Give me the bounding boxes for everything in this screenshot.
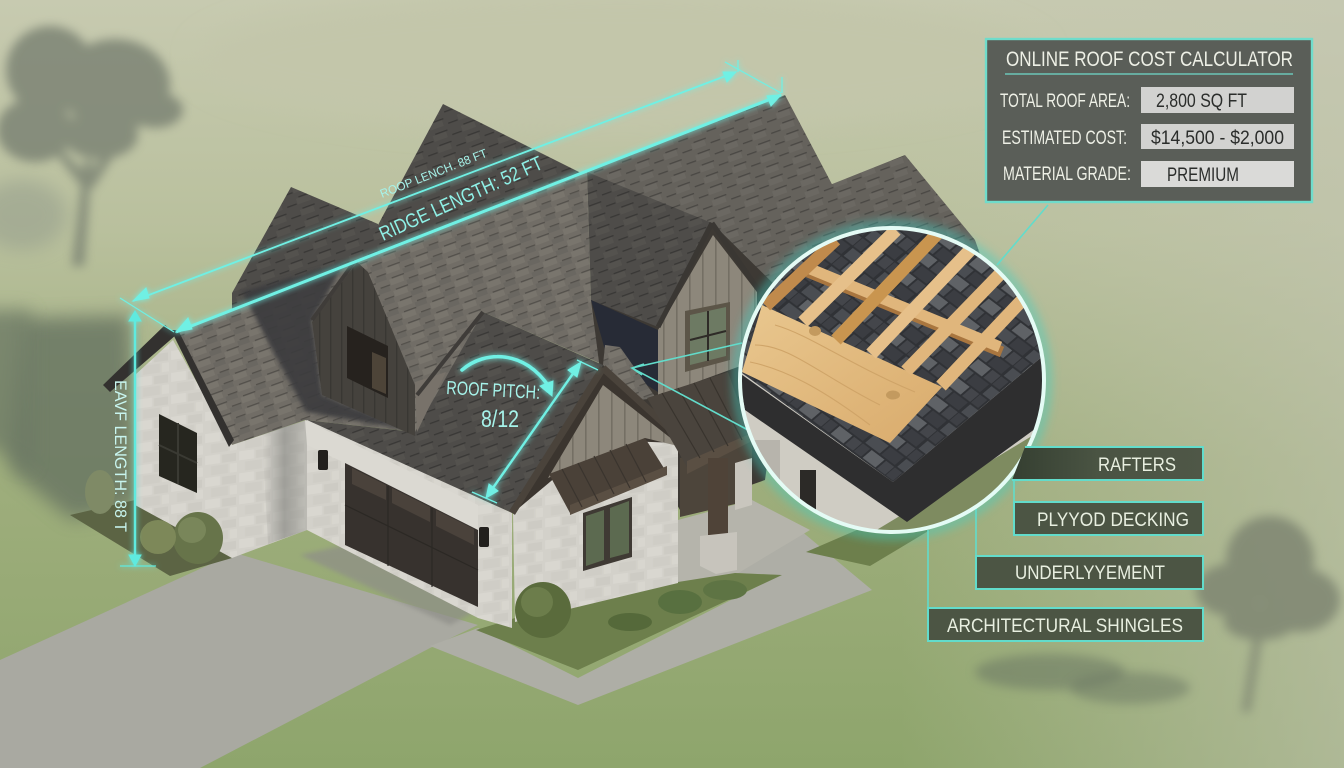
dimension: eave length bbox=[120, 311, 156, 566]
label: roof pitch: ROOF PITCH: bbox=[446, 378, 541, 404]
back roof: far right bbox=[772, 155, 1000, 310]
label: plywood decking bbox=[1014, 502, 1203, 535]
tree: top left bbox=[0, 26, 183, 266]
label: eave length: EAVF LENGTH: 88 T bbox=[111, 380, 130, 532]
row: estimated cost: $14,500 - $2,000 bbox=[1151, 128, 1284, 149]
label: roof pitch: 8/12 bbox=[481, 406, 519, 433]
main hip roof bbox=[173, 172, 620, 445]
garage wall bbox=[307, 420, 512, 628]
roof shadow left of dormer bbox=[242, 262, 410, 430]
label: plywood decking: PLYYOD DECKING bbox=[1037, 510, 1189, 531]
row: estimated cost bbox=[1002, 124, 1294, 149]
garage trim bbox=[305, 420, 478, 530]
wall lamps bbox=[318, 450, 489, 547]
front gable siding bbox=[548, 385, 682, 478]
dimension: roof pitch arc and arrow bbox=[462, 357, 598, 503]
label: architectural shingles bbox=[928, 608, 1203, 641]
row: estimated cost: ESTIMATED COST: bbox=[1002, 128, 1127, 149]
label: rafters bbox=[1012, 447, 1203, 480]
row: total roof area: TOTAL ROOF AREA: bbox=[1000, 91, 1130, 112]
dimension: roof and ridge length bbox=[120, 60, 782, 332]
shingle valley bbox=[603, 345, 656, 400]
label: rafters: RAFTERS bbox=[1098, 455, 1176, 476]
garage door bbox=[345, 463, 478, 607]
center wall corner bbox=[232, 420, 307, 558]
lens ring bbox=[740, 228, 1044, 532]
label: roof length: ROOP LENCH. 88 FT bbox=[378, 146, 490, 201]
lower roof over garage bbox=[305, 312, 603, 513]
label: architectural shingles: ARCHITECTURAL SHINGLES bbox=[947, 616, 1183, 637]
right gable window bbox=[685, 302, 730, 372]
panel: cutaway detail lens bbox=[735, 220, 1050, 540]
back roof: large right bbox=[585, 95, 835, 300]
callout leader lines bbox=[632, 205, 1048, 608]
tree: bottom right bbox=[1196, 516, 1340, 712]
left wall window bbox=[159, 414, 197, 493]
driveway and walkways bbox=[0, 500, 872, 768]
rafters bbox=[766, 230, 1025, 386]
left dormer bbox=[312, 261, 483, 436]
recess shadow bbox=[591, 300, 658, 392]
ground shadows bbox=[0, 180, 1190, 704]
house bbox=[103, 95, 1000, 628]
porch wall bbox=[680, 440, 752, 517]
row: material grade: PREMIUM bbox=[1167, 165, 1239, 186]
upper house underlay bbox=[591, 223, 790, 510]
left gable wall bbox=[135, 340, 232, 558]
row: total roof area: 2,800 SQ FT bbox=[1156, 91, 1247, 112]
panel: online roof cost calculator bbox=[986, 39, 1312, 202]
shrubs bbox=[85, 470, 747, 638]
row: material grade: MATERIAL GRADE: bbox=[1003, 164, 1131, 185]
porch post bbox=[700, 458, 737, 574]
front gable wall bbox=[513, 440, 678, 622]
window awning bbox=[549, 438, 667, 515]
label: underlayment bbox=[976, 556, 1203, 589]
label: roof pitch bbox=[446, 378, 541, 433]
plywood decking bbox=[742, 305, 942, 443]
front window bbox=[583, 497, 632, 571]
front gable fascia bbox=[512, 368, 693, 513]
back roof: center peak bbox=[378, 104, 587, 258]
row: total roof area bbox=[1000, 87, 1294, 113]
porch roof bbox=[647, 372, 752, 474]
left gable fascia bbox=[103, 325, 234, 447]
row: material grade bbox=[1003, 161, 1294, 187]
shingles layer bbox=[735, 220, 1050, 482]
panel: layer labels bbox=[928, 447, 1203, 641]
underlayment layer bbox=[738, 350, 1050, 522]
right gable roof bbox=[587, 172, 712, 327]
lens glow bbox=[737, 225, 1047, 535]
label: underlayment: UNDERLYYEMENT bbox=[1015, 563, 1165, 584]
back roof: left peak bbox=[232, 187, 378, 312]
right gable wall bbox=[658, 235, 757, 396]
front gable backing bbox=[512, 368, 693, 513]
planting beds bbox=[70, 500, 930, 670]
label: ridge length: RIDGE LENGTH: 52 FT bbox=[376, 152, 546, 246]
lens contents bbox=[742, 230, 1042, 530]
